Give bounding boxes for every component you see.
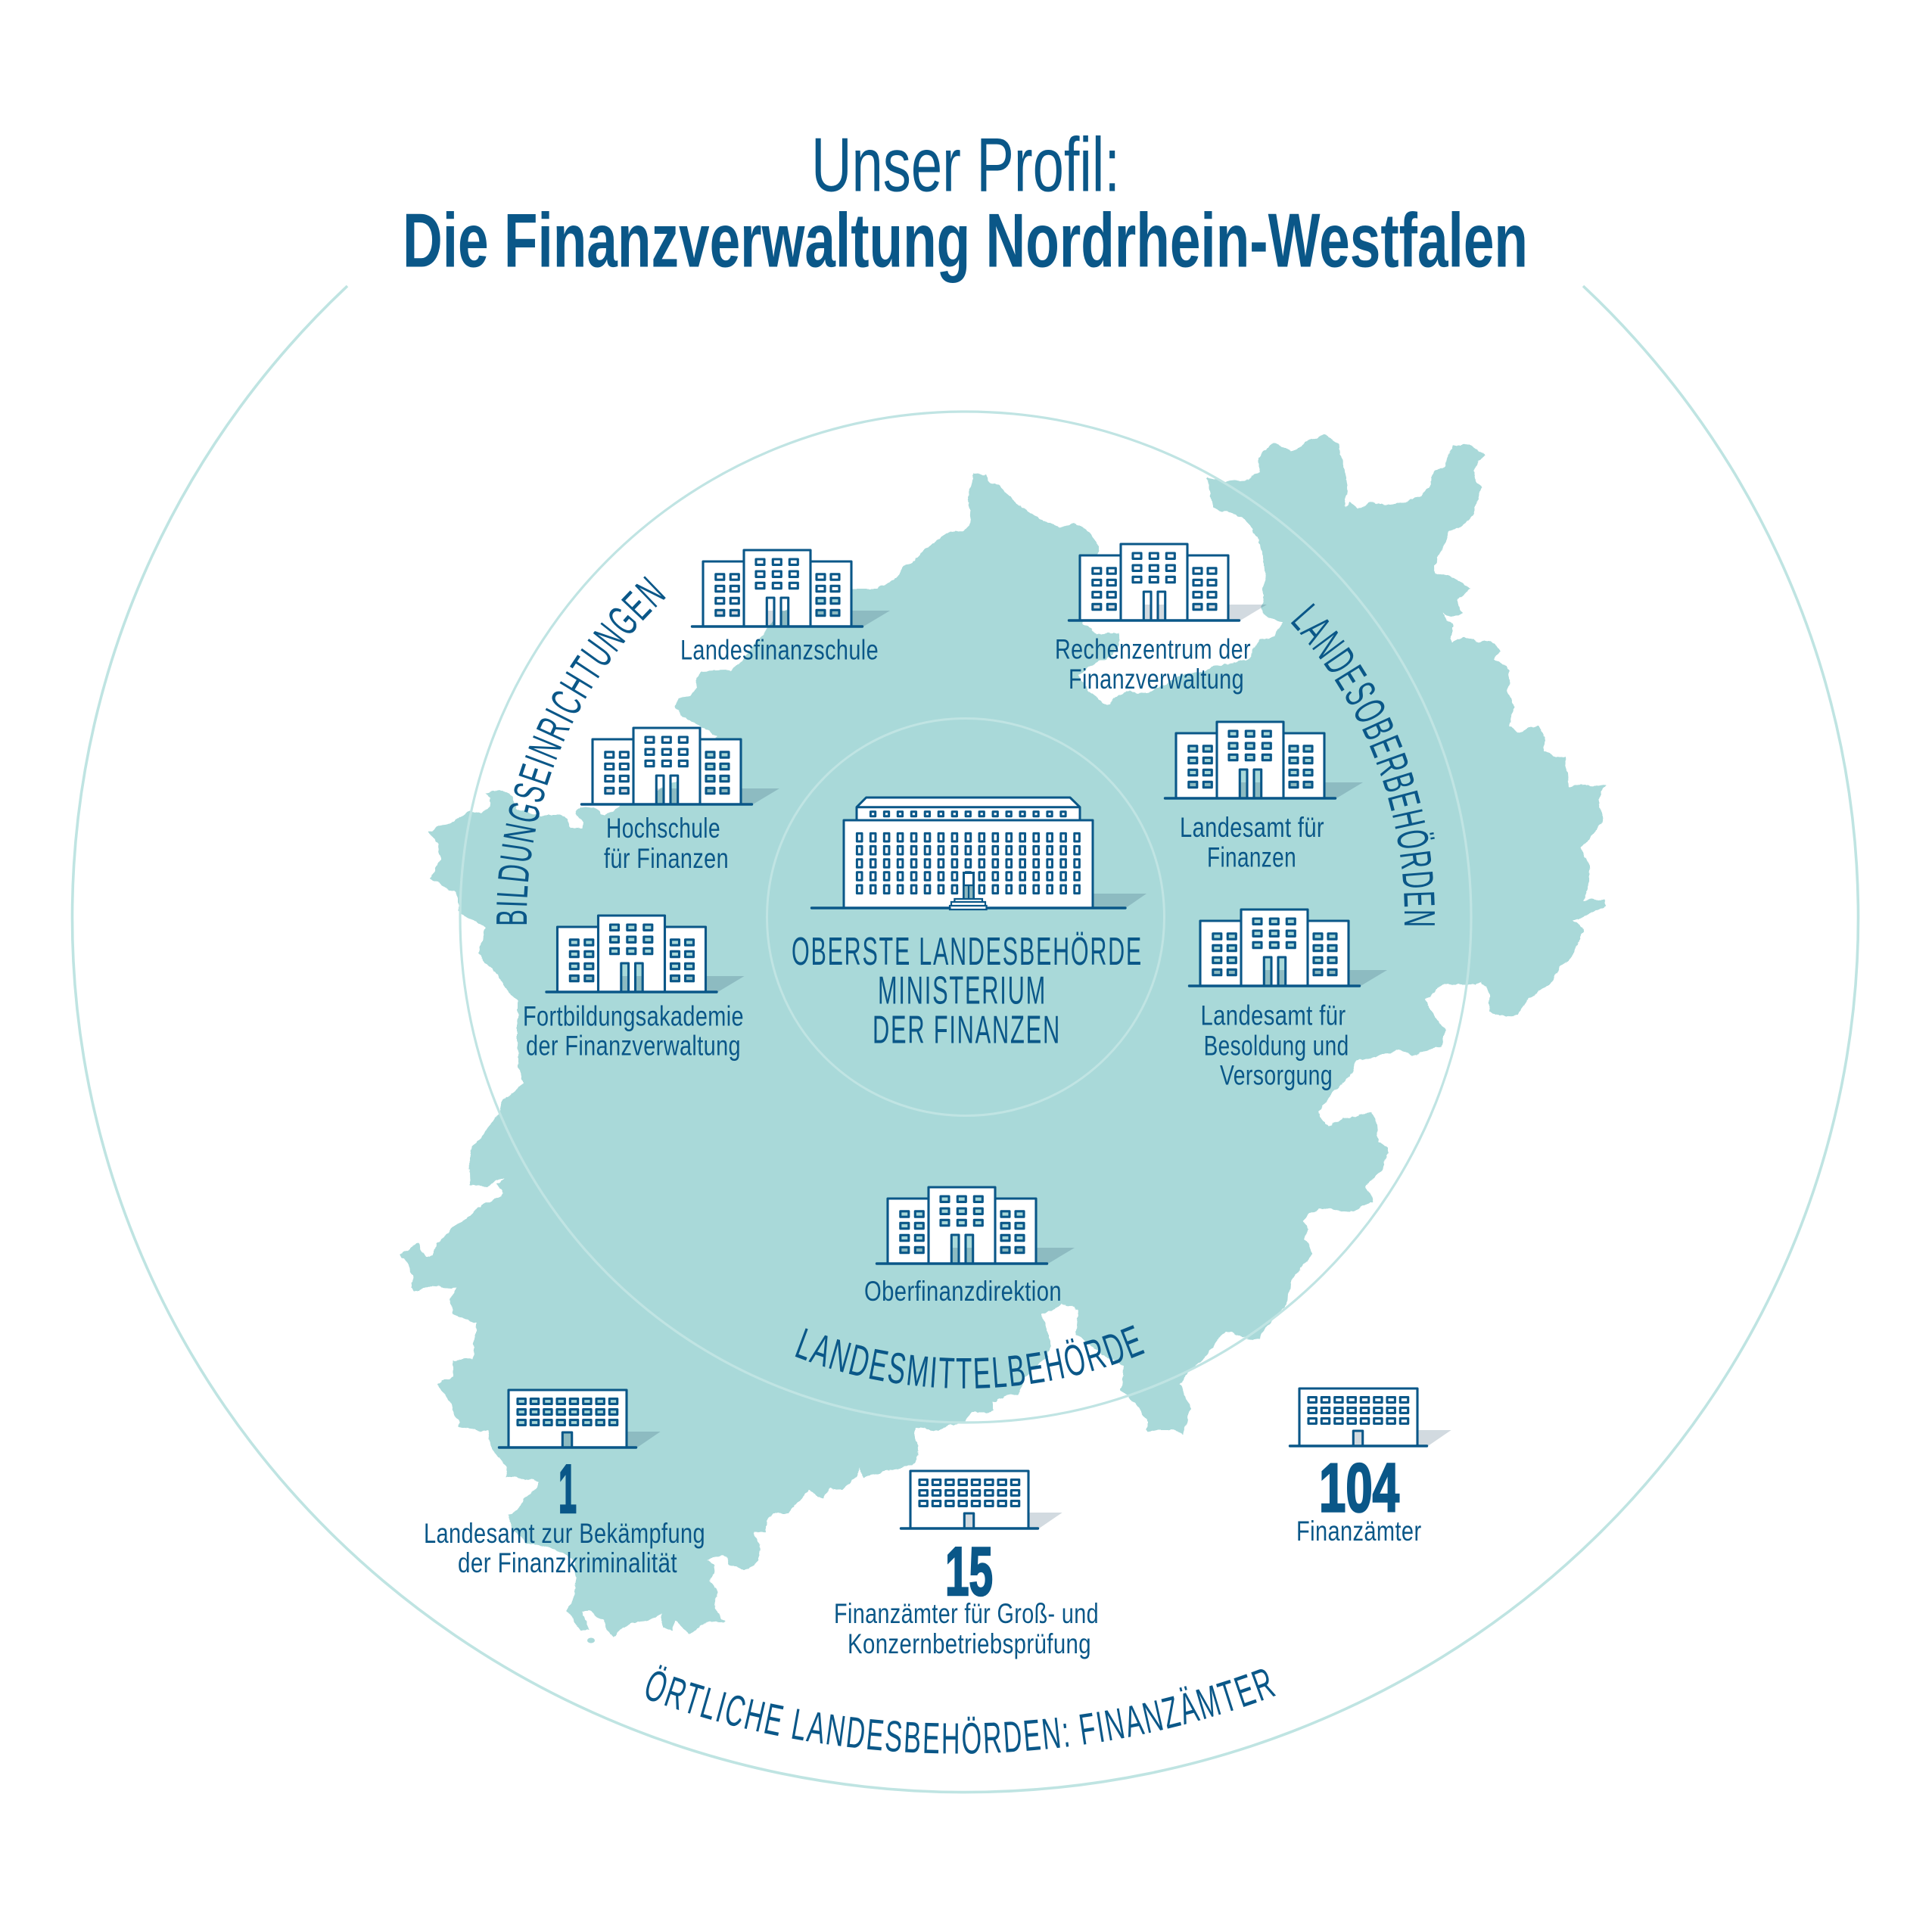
building: Oberfinanzdirektion: [876, 1187, 1075, 1264]
building: ministry: [811, 798, 1146, 910]
label: Rechenzentrum: [1055, 634, 1251, 695]
building: Fortbildungsakademie: [546, 916, 745, 992]
label: Landesamt für Besoldung: [1200, 1000, 1349, 1091]
number: 15: 15: [945, 1534, 993, 1610]
label: Finanzämter Groß- und Konzernbetriebsprüfung: Finanzämter für Groß- und: [834, 1598, 1099, 1629]
ring: inner: [767, 719, 1164, 1115]
label: ministry: [792, 930, 1143, 1052]
label: Oberfinanzdirektion: Oberfinanzdirektion: [864, 1276, 1062, 1307]
building: Landesamt für Besoldung: [1190, 910, 1387, 986]
ring: outer: [73, 286, 1859, 1793]
building: Landesamt für Finanzen: [1165, 722, 1363, 798]
label: Fortbildungsakademie: [523, 1001, 744, 1062]
label: Rechenzentrum: Finanzverwaltung: [1069, 664, 1244, 695]
label: Rechenzentrum: Rechenzentrum der: [1055, 634, 1251, 665]
building: Finanzämter: [1290, 1388, 1451, 1446]
label: Landesamt für Finanzen: [1180, 812, 1324, 873]
curved label: Örtliche Landesbehörden: ÖRTLICHE LANDESBEHÖRDEN: FINANZÄMTER: [646, 1665, 1276, 1754]
label: Landesamt Finanzkriminalität: der Finanzkriminalität: [458, 1547, 677, 1578]
label: Landesamt für Finanzen: Landesamt für: [1180, 812, 1324, 843]
label: ministry: MINISTERIUM: [878, 969, 1047, 1013]
label: Fortbildungsakademie: der Finanzverwaltung: [526, 1031, 741, 1062]
label: Landesamt für Besoldung: Besoldung und: [1204, 1030, 1349, 1061]
building: Hochschule: [581, 728, 779, 804]
label: Finanzämter Groß- und Konzernbetriebsprüfung: [834, 1598, 1099, 1659]
ring: middle: [460, 412, 1471, 1423]
map: Nordrhein-Westfalen: [402, 434, 1607, 1637]
text: 1: [558, 1451, 577, 1528]
label: Landesamt für Besoldung: Landesamt für: [1200, 1000, 1346, 1031]
label: Fortbildungsakademie: Fortbildungsakademie: [523, 1001, 744, 1032]
building: Landesamt Finanzkriminalität: [499, 1390, 661, 1447]
label: ministry: OBERSTE LANDESBEHÖRDE: [792, 930, 1143, 974]
building: Finanzämter Groß- und Konzernbetriebsprüfung: [901, 1471, 1062, 1528]
title line 1: Unser Profil:: [811, 123, 1120, 208]
label: Landesamt Finanzkriminalität: Landesamt zur Bekämpfung: [424, 1518, 705, 1549]
title: [403, 123, 1528, 284]
label: Landesamt für Besoldung: Versorgung: [1220, 1060, 1333, 1091]
label: Finanzämter: Finanzämter: [1296, 1516, 1421, 1547]
curved label: Bildungseinrichtungen: BILDUNGSEINRICHTUNGEN: [496, 576, 666, 925]
label: Landesamt Finanzkriminalität: [424, 1518, 705, 1578]
curved label: Landesmittelbehörde: LANDESMITTELBEHÖRDE: [795, 1325, 1145, 1388]
curved label: Landesoberbehörden: LANDESOBERBEHÖRDEN: [1291, 603, 1435, 925]
label: Hochschule: Hochschule: [606, 813, 720, 844]
label: Landesfinanzschule: Landesfinanzschule: [680, 635, 879, 666]
map: island: [587, 1637, 595, 1643]
building: Landesfinanzschule: [692, 550, 890, 627]
title line 2: Die Finanzverwaltung Nordrhein-Westfalen: [403, 199, 1528, 284]
building: Rechenzentrum: [1069, 544, 1267, 620]
label: Hochschule: [604, 813, 729, 874]
label: Landesamt für Finanzen: Finanzen: [1207, 842, 1296, 873]
label: Finanzämter Groß- und Konzernbetriebsprüfung: Konzernbetriebsprüfung: [848, 1628, 1091, 1659]
label: ministry: DER FINANZEN: [873, 1008, 1061, 1052]
label: Hochschule: für Finanzen: [604, 843, 729, 874]
number: 104: 104: [1319, 1450, 1399, 1527]
